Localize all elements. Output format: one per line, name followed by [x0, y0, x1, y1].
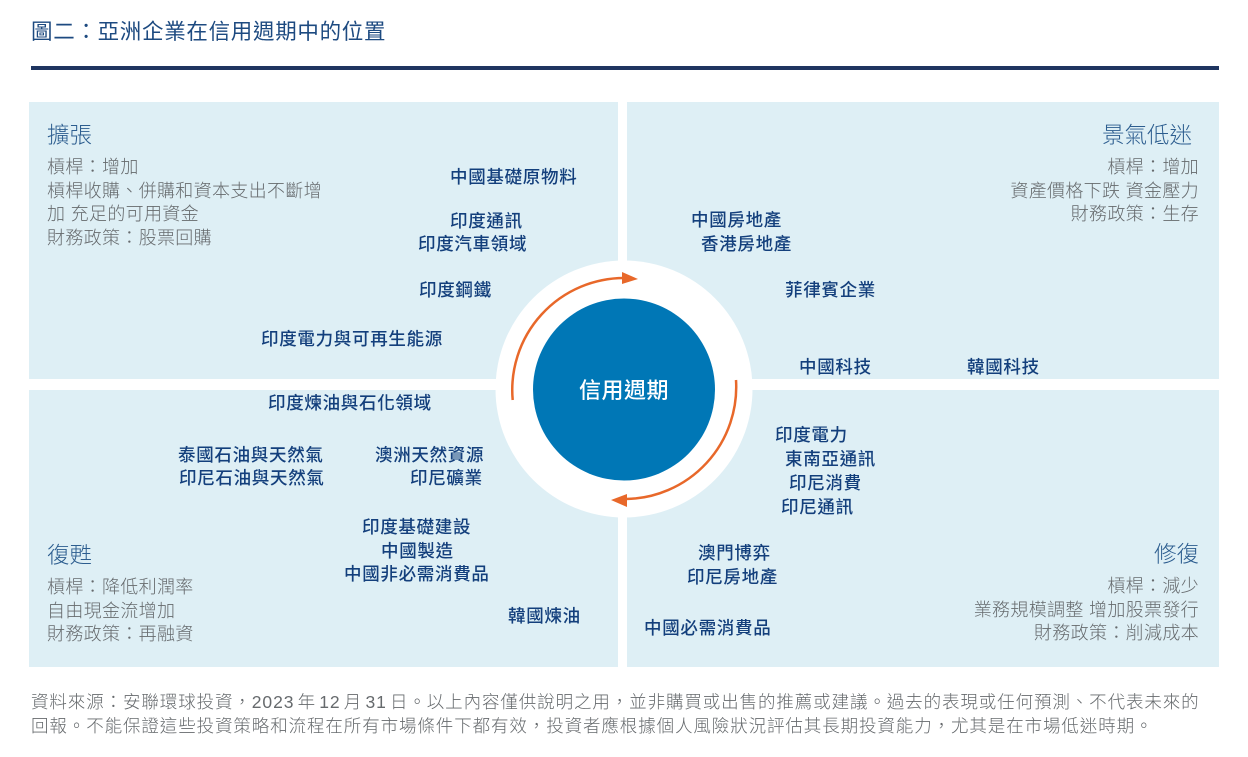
label: 印尼消費	[789, 473, 862, 493]
label: 印尼石油與天然氣	[179, 468, 325, 488]
label: 中國非必需消費品	[344, 564, 490, 584]
label: 韓國科技	[967, 357, 1040, 377]
text: expansion details: 加 充足的可用資金	[47, 204, 199, 224]
label: 印度煉油與石化領域	[268, 393, 432, 413]
label: 中國科技	[799, 357, 872, 377]
footnote: 回報。不能保證這些投資策略和流程在所有市場條件下都有效，投資者應根據個人風險狀況評估其長期投資能力，尤其是在市場低迷時期。	[31, 716, 1153, 736]
label: 印度通訊	[450, 211, 523, 231]
label: 印度電力	[775, 425, 848, 445]
text: repair details	[974, 576, 1199, 643]
text: recovery details: 自由現金流增加	[47, 601, 175, 621]
text: expansion details: 財務政策：股票回購	[47, 228, 212, 248]
text: downturn details: 槓桿：增加	[1107, 157, 1199, 177]
heading: repair: 修復	[1154, 542, 1199, 567]
label: 韓國煉油	[508, 606, 581, 626]
label: 中國房地產	[691, 210, 782, 230]
text: downturn details: 資產價格下跌 資金壓力	[1010, 181, 1199, 201]
text: expansion details: 槓桿：增加	[47, 157, 139, 177]
centre label: 信用週期	[579, 378, 669, 403]
text: repair details: 槓桿：減少	[1107, 576, 1199, 596]
panel: downturn	[627, 102, 1219, 379]
label: 印度鋼鐵	[419, 280, 492, 300]
text: recovery details: 財務政策：再融資	[47, 624, 194, 644]
title: 圖二：亞洲企業在信用週期中的位置	[31, 20, 386, 44]
blue centre circle	[533, 298, 715, 480]
label: 中國基礎原物料	[450, 167, 577, 187]
text: expansion details	[47, 157, 322, 248]
text: recovery details: 槓桿：降低利潤率	[47, 577, 194, 597]
heading: recovery: 復甦	[47, 543, 92, 568]
text: downturn details	[1010, 157, 1199, 224]
footnote	[31, 692, 1200, 736]
label: 澳門博弈	[698, 543, 771, 563]
label: 印度汽車領域	[418, 234, 527, 254]
label: 中國製造	[381, 541, 454, 561]
label: 泰國石油與天然氣	[178, 445, 324, 465]
text: repair details: 財務政策：削減成本	[1034, 623, 1199, 643]
label: 印度基礎建設	[362, 517, 471, 537]
label: 中國必需消費品	[644, 618, 771, 638]
text: downturn details: 財務政策：生存	[1071, 204, 1199, 224]
text: recovery details	[47, 577, 194, 644]
label: 香港房地產	[701, 234, 792, 254]
label: 印尼房地產	[687, 567, 778, 587]
white ring	[496, 260, 752, 518]
label: 澳洲天然資源	[375, 445, 484, 465]
label: 印度電力與可再生能源	[261, 329, 443, 349]
label: 印尼通訊	[781, 497, 854, 517]
label: 東南亞通訊	[785, 449, 876, 469]
heading: expansion: 擴張	[47, 123, 92, 148]
label: 印尼礦業	[410, 468, 483, 488]
panel: repair	[627, 390, 1219, 667]
arrow: upper-left arc	[512, 272, 638, 400]
text: expansion details: 槓桿收購、併購和資本支出不斷增	[47, 181, 322, 201]
label: 菲律賓企業	[785, 280, 876, 300]
footnote: 資料來源：安聯環球投資，2023 年 12 月 31 日。以上內容僅供說明之用，並非購買或出售的推薦或建議。過去的表現或任何預測、不代表未來的	[31, 692, 1200, 712]
panel: expansion	[29, 102, 618, 379]
panel: recovery	[29, 390, 618, 667]
arrow: lower-right arc	[611, 380, 736, 507]
heading: downturn: 景氣低迷	[1102, 123, 1192, 148]
text: repair details: 業務規模調整 增加股票發行	[974, 600, 1199, 620]
